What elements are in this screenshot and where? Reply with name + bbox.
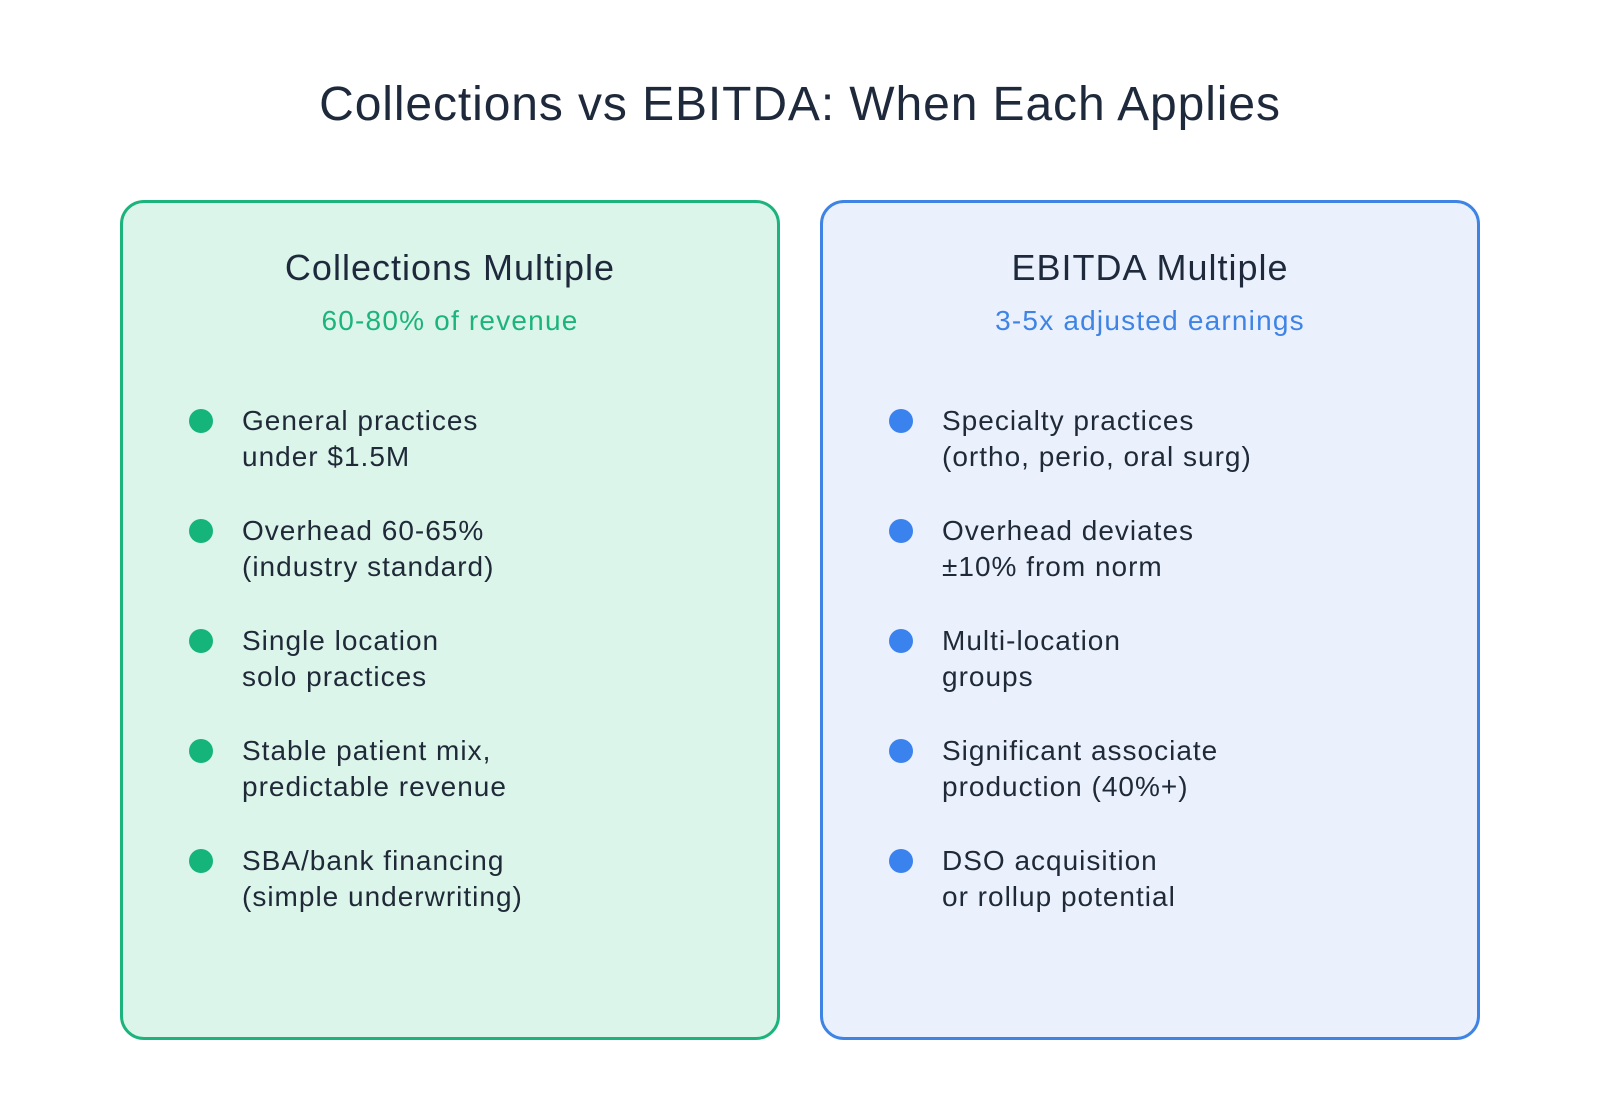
panel: collections multiple [120, 200, 780, 1040]
bullet 4: Stable patient mix, [242, 735, 491, 766]
bullet 3 [889, 625, 1121, 692]
bullet 2 [889, 515, 1194, 582]
bullet 1 [189, 405, 478, 472]
bullet 3: Single location [242, 625, 439, 656]
bullet 5: or rollup potential [942, 881, 1176, 912]
bullet 2: Overhead 60-65% [242, 515, 484, 546]
bullet 3: groups [942, 661, 1034, 692]
bullet 5 [889, 845, 1176, 912]
bullet 2: Overhead deviates [942, 515, 1194, 546]
bullet 3: Multi-location [942, 625, 1121, 656]
bullet 4 [889, 735, 1218, 802]
bullet 5: (simple underwriting) [242, 881, 523, 912]
bullet 5 [189, 845, 523, 912]
bullet 2: ±10% from norm [942, 551, 1163, 582]
bullet 2: (industry standard) [242, 551, 494, 582]
bullet 2 [189, 515, 494, 582]
bullet 4 [189, 735, 507, 802]
heading: EBITDA: EBITDA Multiple [1011, 247, 1289, 288]
heading: collections: Collections Multiple [285, 247, 615, 288]
bullet 1: under $1.5M [242, 441, 410, 472]
bullet 1: Specialty practices [942, 405, 1194, 436]
bullet 1: (ortho, perio, oral surg) [942, 441, 1252, 472]
bullet 5: SBA/bank financing [242, 845, 504, 876]
subtitle: collections: 60-80% of revenue [321, 305, 578, 336]
bullet 4: predictable revenue [242, 771, 507, 802]
bullet 4: production (40%+) [942, 771, 1189, 802]
bullet 1 [889, 405, 1252, 472]
bullet 3 [189, 625, 439, 692]
panel: EBITDA multiple [820, 200, 1480, 1040]
subtitle: EBITDA: 3-5x adjusted earnings [995, 305, 1305, 336]
bullet 3: solo practices [242, 661, 427, 692]
bullet 1: General practices [242, 405, 478, 436]
title: Collections vs EBITDA: When Each Applies [319, 78, 1281, 131]
bullet 4: Significant associate [942, 735, 1218, 766]
bullet 5: DSO acquisition [942, 845, 1158, 876]
